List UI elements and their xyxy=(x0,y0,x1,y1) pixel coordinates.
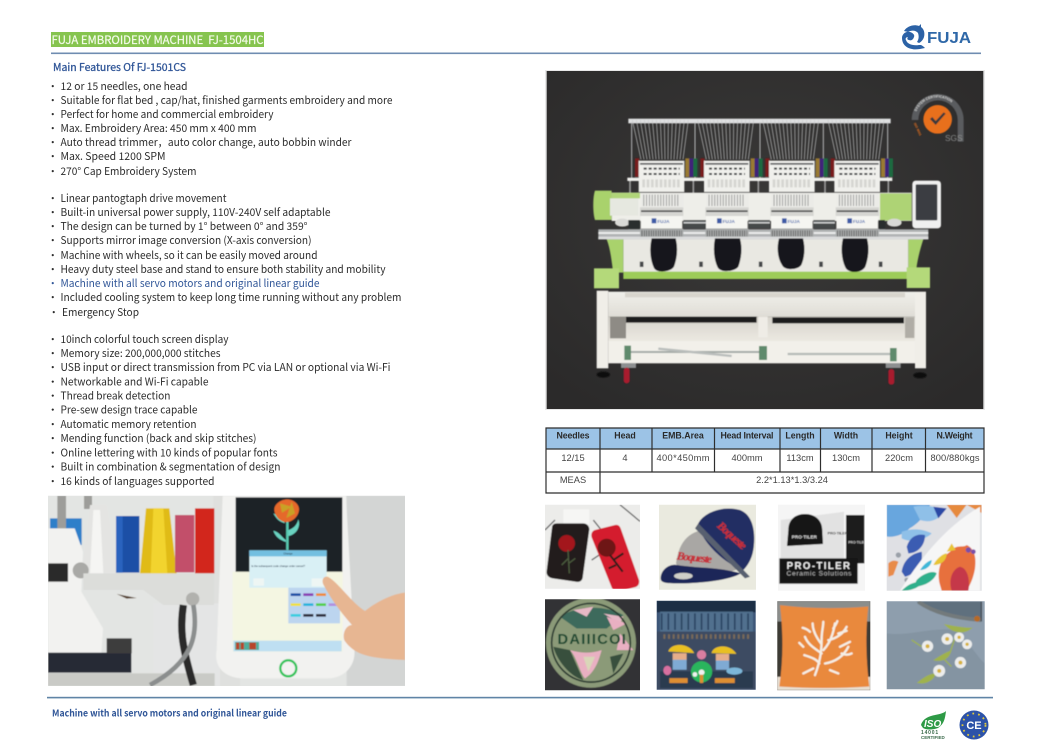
photo: embroidered beanie and shirts: PRO·TILER xyxy=(848,540,867,544)
photo: embroidered beanie and shirts: PRO·TILER xyxy=(828,532,848,536)
table values row: 113cm xyxy=(786,453,814,463)
icon: ISO 14001 certified badge: CERTIFIED xyxy=(921,735,946,740)
table measurement row xyxy=(560,475,828,485)
footer caption: Machine with all servo motors and original linear guide xyxy=(52,706,287,720)
icon: ISO 14001 certified badge xyxy=(921,711,946,740)
feature list: controller: • xyxy=(48,332,58,347)
feature list: basic capabilities: • xyxy=(48,164,58,179)
feature list: mechanics: Built-in universal power supply, 110V-240V self adaptable xyxy=(60,205,331,220)
feature list: mechanics: Machine with wheels, so it can be easily moved around xyxy=(60,248,318,263)
feature list: mechanics: • xyxy=(48,205,58,220)
SGS certification badge xyxy=(911,94,964,143)
touch screen xyxy=(216,496,355,678)
feature list: basic capabilities: • xyxy=(48,149,58,164)
feature list: controller: • xyxy=(48,360,58,375)
table header row: Length xyxy=(785,430,815,440)
sample gallery xyxy=(540,500,988,693)
feature list: mechanics: Supports mirror image conversion (X-axis conversion) xyxy=(60,233,312,248)
feature list: controller: • xyxy=(48,346,58,361)
thread stand xyxy=(627,119,892,193)
photo: floral embroidery on white fabric xyxy=(886,504,982,591)
photo: embroidered phone cases xyxy=(545,504,640,589)
feature list: basic capabilities: • xyxy=(48,121,58,136)
table values row: 4 xyxy=(622,453,628,463)
hand xyxy=(323,577,405,660)
photo: floral embroidery on denim xyxy=(886,601,985,690)
feature list: controller: 10inch colorful touch screen display xyxy=(60,332,229,347)
feature list: controller: Automatic memory retention xyxy=(60,417,196,432)
title banner: FUJA EMBROIDERY MACHINE FJ-1504HC xyxy=(52,32,264,48)
footer rule xyxy=(47,697,993,698)
rail xyxy=(598,229,928,239)
table measurement row: 2.2*1.13*1.3/3.24 xyxy=(756,475,828,485)
feature list: controller: Memory size: 200,000,000 stitches xyxy=(60,346,221,361)
feature list: controller: • xyxy=(48,474,58,489)
photo: orange cushion with white coral embroidery xyxy=(777,601,870,690)
feature list: controller: • xyxy=(48,431,58,446)
table values row: 12/15 xyxy=(561,453,585,463)
photo: touch screen controller xyxy=(48,496,405,686)
drawer slides xyxy=(624,346,897,361)
table header row: N.Weight xyxy=(936,430,973,440)
table values row: 400*450mm xyxy=(656,453,710,463)
feature list: mechanics: • xyxy=(48,262,58,277)
table header row xyxy=(546,428,984,449)
feature list: controller: Mending function (back and skip stitches) xyxy=(60,431,256,446)
SGS certification badge: SYSTEM CERTIFICATION xyxy=(914,94,953,112)
photo: embroidered beanie and shirts xyxy=(778,505,867,590)
table measurement row: MEAS xyxy=(560,475,586,485)
feature list: controller: Pre-sew design trace capable xyxy=(60,402,198,418)
feature list: controller: 16 kinds of languages supported xyxy=(60,474,214,489)
table header row: Height xyxy=(885,430,913,440)
table header row: Needles xyxy=(556,430,590,440)
feature list: mechanics: Heavy duty steel base and stand to ensure both stability and mobility xyxy=(60,262,386,277)
machine arm xyxy=(48,528,214,685)
dialog: Is the subsequent code change order cancel? xyxy=(251,564,306,568)
feature list: basic capabilities: • xyxy=(48,93,58,108)
feature list: mechanics: Machine with all servo motors and original linear guide xyxy=(60,276,320,291)
feature list: controller: • xyxy=(48,388,58,404)
header rule xyxy=(51,52,981,54)
feature list: basic capabilities: Max. Embroidery Area: 450 mm x 400 mm xyxy=(60,121,256,136)
icon: ISO 14001 certified badge: 14001 xyxy=(921,730,939,736)
table values row: 220cm xyxy=(885,453,913,463)
table header row: Head Interval xyxy=(720,430,774,440)
feature list: basic capabilities: Max. Speed 1200 SPM xyxy=(60,149,166,164)
feature list: controller: Online lettering with 10 kinds of popular fonts xyxy=(60,446,278,460)
feature list: mechanics: • xyxy=(48,191,58,206)
feature list: controller: USB input or direct transmission from PC via LAN or optional via Wi-Fi xyxy=(60,360,391,375)
feature list: controller xyxy=(48,332,391,489)
photo: round embroidered badge: DAIIICOI xyxy=(558,632,626,648)
feature list: basic capabilities xyxy=(48,79,393,179)
table values row xyxy=(561,453,980,463)
feature list: mechanics: • xyxy=(48,305,59,320)
photo: embroidered caps xyxy=(659,504,756,590)
feature list: basic capabilities: 12 or 15 needles, one head xyxy=(60,79,188,94)
dialog xyxy=(249,550,327,588)
thread cones xyxy=(50,496,214,573)
lower frame xyxy=(594,239,930,288)
section heading: Main Features Of FJ-1501CS xyxy=(53,60,186,75)
photo: embroidered beanie and shirts: Ceramic Solutions xyxy=(786,571,852,578)
feature list: basic capabilities: Perfect for home and commercial embroidery xyxy=(60,107,274,122)
SGS certification badge: ISO 9001 xyxy=(913,122,922,137)
dialog: Change xyxy=(283,552,293,556)
feature list: basic capabilities: • xyxy=(48,135,58,150)
rose design xyxy=(273,499,299,550)
feature list: controller: • xyxy=(48,402,58,418)
wheels and feet xyxy=(597,363,927,385)
touch screen monitor xyxy=(912,181,941,228)
feature list: mechanics: Included cooling system to keep long time running without any problem xyxy=(60,290,402,305)
table header row: EMB.Area xyxy=(662,430,704,440)
feature list: basic capabilities: Auto thread trimmer，auto color change, auto bobbin winder xyxy=(60,135,352,150)
photo: embroidered caps: Boqueste xyxy=(714,519,749,552)
feature list: controller: Thread break detection xyxy=(60,388,170,404)
feature list: controller: Networkable and Wi-Fi capable xyxy=(60,374,209,390)
icon: ISO 14001 certified badge: ISO xyxy=(924,719,941,730)
icon: CE mark badge: CE xyxy=(966,720,982,732)
main beam xyxy=(593,191,912,229)
table values row: 130cm xyxy=(832,453,860,463)
table values row: 800/880kgs xyxy=(930,453,980,463)
table values row: 400mm xyxy=(731,453,763,463)
table stand xyxy=(597,291,926,368)
FUJA logo: FUJA xyxy=(927,30,971,47)
icon: CE mark badge xyxy=(960,710,988,740)
feature list: mechanics: • xyxy=(48,290,58,305)
photo: round embroidered badge xyxy=(545,599,640,690)
feature list: basic capabilities: Suitable for flat bed , cap/hat, finished garments embroidery and more xyxy=(60,93,393,108)
specification table xyxy=(546,428,984,493)
feature list: controller: • xyxy=(48,417,58,432)
feature list: controller: • xyxy=(48,446,58,460)
caps xyxy=(650,238,868,272)
feature list: mechanics: • xyxy=(48,219,58,234)
sewing heads xyxy=(632,120,893,237)
feature list: basic capabilities: • xyxy=(48,107,58,122)
photo: embroidery machine xyxy=(545,70,985,410)
feature list: controller: • xyxy=(48,460,58,474)
feature list: mechanics: • xyxy=(48,248,58,263)
feature list: mechanics: • xyxy=(48,233,58,248)
table header row: Head xyxy=(614,430,636,440)
photo: embroidered caps: Boqueste xyxy=(675,550,712,566)
feature list: basic capabilities: • xyxy=(48,79,58,94)
photo: embroidered beanie and shirts: PRO·TILER xyxy=(792,535,818,540)
feature list: mechanics: Emergency Stop xyxy=(62,305,139,320)
photo: embroidered knit sweater xyxy=(656,600,756,690)
feature list: controller: • xyxy=(48,374,58,390)
SGS certification badge: SGS xyxy=(945,133,963,143)
feature list: mechanics: • xyxy=(48,276,58,291)
table header row: Width xyxy=(834,430,858,440)
feature list: mechanics: The design can be turned by 1° between 0° and 359° xyxy=(60,219,308,234)
photo: embroidered beanie and shirts: PRO-TILER xyxy=(787,561,850,572)
feature list: basic capabilities: 270° Cap Embroidery System xyxy=(60,164,196,179)
icon: dolphin wave xyxy=(902,24,925,49)
feature list: controller: Built in combination & segmentation of design xyxy=(60,460,280,474)
FUJA logo xyxy=(902,24,971,49)
feature list: mechanics xyxy=(48,191,402,320)
table grid xyxy=(546,428,984,493)
adjusters xyxy=(642,262,881,267)
feature list: mechanics: Linear pantogtaph drive movement xyxy=(60,191,227,206)
